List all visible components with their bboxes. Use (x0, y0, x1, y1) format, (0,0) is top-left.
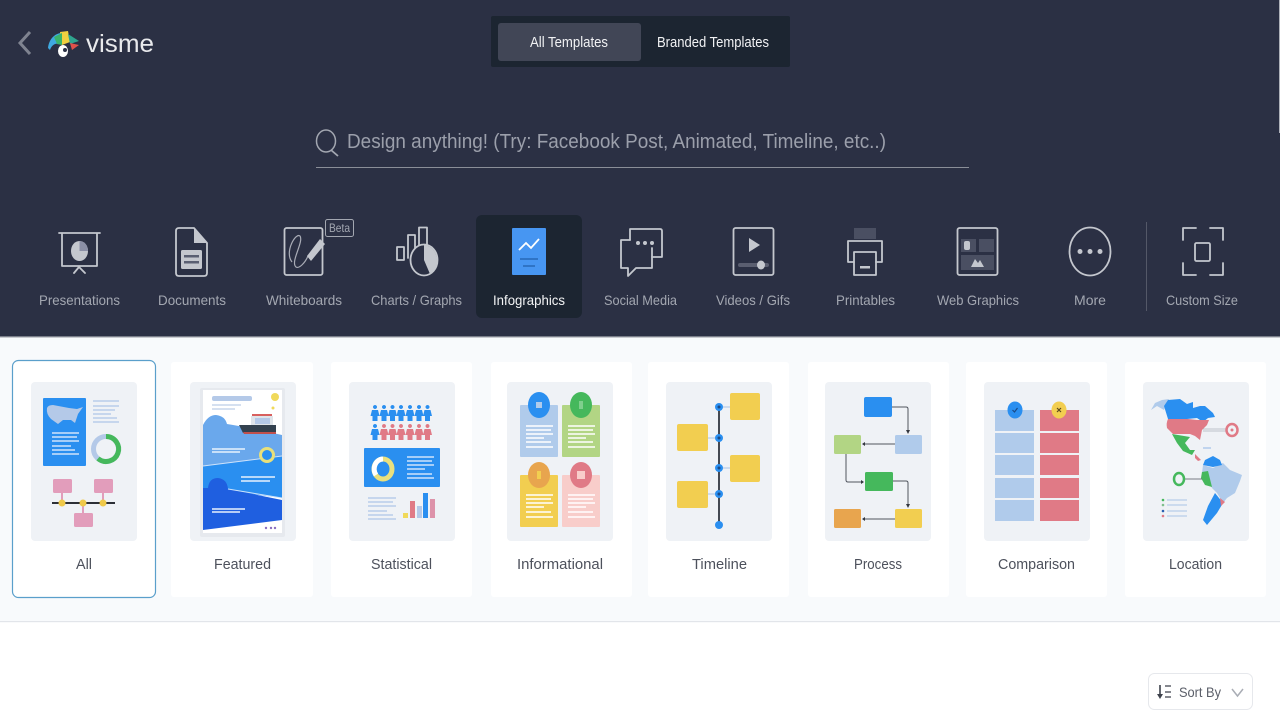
card: featured (171, 362, 313, 597)
nav: whiteboards (266, 220, 354, 308)
card: all (12, 360, 156, 598)
card: featured: Featured (214, 557, 271, 573)
nav: more: More (1074, 292, 1106, 308)
card: process: Process (854, 557, 902, 573)
category band (0, 338, 1280, 622)
nav: presentations (39, 233, 120, 308)
logo: visme (48, 30, 154, 58)
sort by dropdown (1148, 674, 1252, 710)
template toggle: Branded Templates (657, 35, 769, 51)
nav: custom size: Custom Size (1166, 292, 1238, 308)
sort by dropdown: Sort By (1179, 684, 1221, 700)
card: informational (491, 362, 632, 597)
nav: printables: Printables (836, 292, 895, 308)
nav: presentations: Presentations (39, 292, 120, 308)
logo: visme: visme (86, 30, 154, 58)
nav: whiteboards: Whiteboards (266, 292, 342, 308)
nav: charts and graphs (371, 228, 462, 308)
search bar: Design anything! (Try: Facebook Post, Animated, Timeline, etc..) (347, 131, 886, 153)
nav: more (1070, 228, 1110, 308)
nav: documents (158, 228, 226, 308)
nav: infographics active: Infographics (493, 292, 565, 308)
nav: infographics active (476, 215, 582, 318)
card: location: Location (1169, 557, 1222, 573)
card: statistical: Statistical (371, 557, 432, 573)
nav: documents: Documents (158, 292, 226, 308)
icon: back chevron (20, 32, 30, 54)
nav: videos and gifs (716, 228, 790, 308)
card: timeline (648, 362, 789, 597)
card: process (808, 362, 949, 597)
card: timeline: Timeline (692, 557, 747, 573)
search bar (316, 130, 969, 168)
nav: web graphics: Web Graphics (937, 292, 1019, 308)
template toggle: All Templates (530, 35, 608, 51)
badge: beta: Beta (329, 221, 350, 235)
nav: web graphics (937, 228, 1019, 308)
card: comparison: Comparison (998, 557, 1075, 573)
card: location (1125, 362, 1266, 597)
nav: social media: Social Media (604, 292, 677, 308)
nav: charts and graphs: Charts / Graphs (371, 292, 462, 308)
nav: videos and gifs: Videos / Gifs (716, 292, 790, 308)
card: informational: Informational (517, 557, 603, 573)
card: all: All (76, 557, 92, 573)
card: statistical (331, 362, 472, 597)
nav: custom size (1166, 228, 1238, 308)
nav: social media (604, 229, 677, 308)
nav: printables (836, 228, 895, 308)
template toggle (491, 16, 790, 67)
header panel (0, 0, 1280, 338)
card: comparison (966, 362, 1107, 597)
